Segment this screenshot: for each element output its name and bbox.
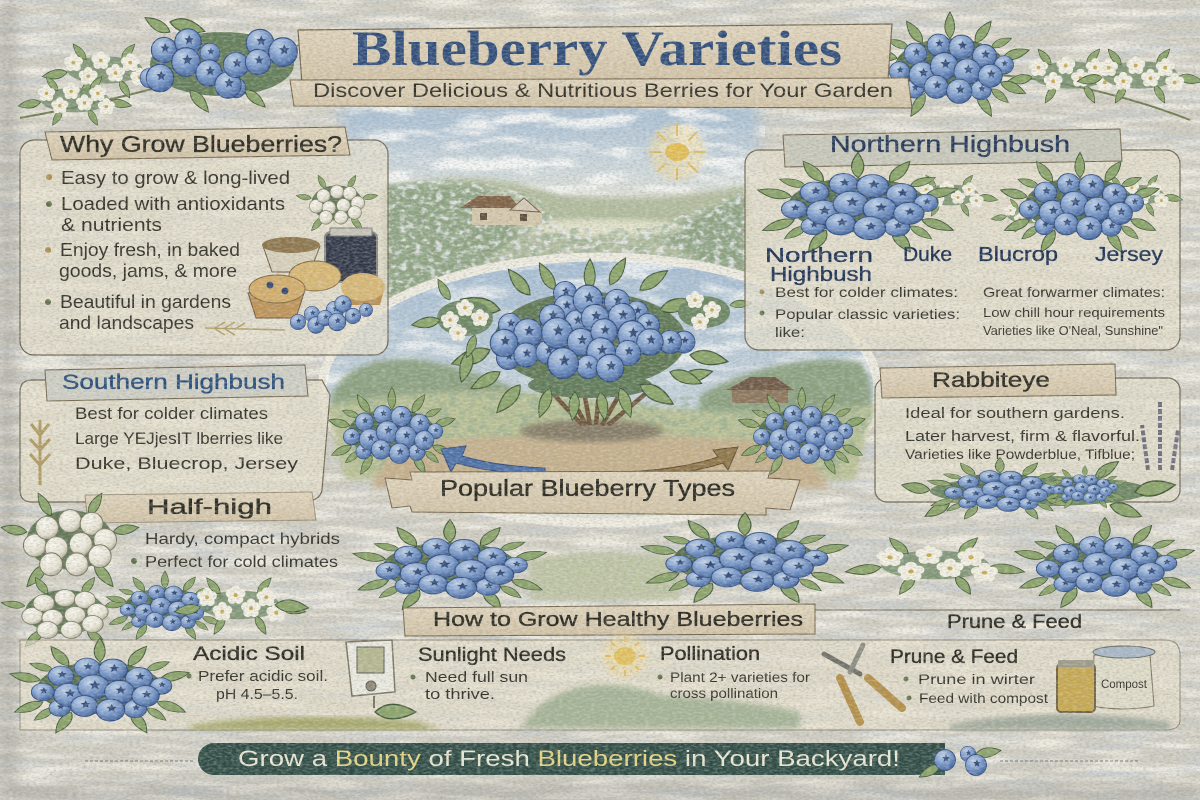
banner: half-high (85, 492, 316, 523)
banner: popular blueberry types (385, 471, 800, 515)
banner: how to grow (403, 604, 815, 636)
icon: sun (649, 124, 705, 180)
bush three (1014, 518, 1196, 610)
benefits list (45, 168, 290, 333)
benefits list: Enjoy fresh, in baked (60, 240, 240, 260)
highbush notes: Varieties like O'Neal, Sunshine" (983, 324, 1163, 338)
highbush notes: Popular classic varieties: (775, 306, 960, 322)
benefits list: Loaded with antioxidants (61, 194, 285, 214)
side bush left (327, 387, 456, 476)
icon: ph meter (346, 640, 416, 719)
icon: wheat (30, 420, 50, 485)
banner: southern highbush (45, 365, 308, 401)
highbush notes: Best for colder climates: (775, 284, 958, 300)
banner: rabbiteye (880, 364, 1116, 398)
title banner: Blueberry Varieties (352, 20, 842, 76)
banner: why grow (45, 127, 350, 160)
berry cluster left (756, 152, 998, 254)
arrow: right (620, 447, 738, 476)
berry cluster right (991, 152, 1183, 254)
step: prune and feed: Prune & Feed (890, 647, 1018, 668)
benefits list: goods, jams, & more (59, 261, 237, 281)
banner: half-high: Half-high (147, 496, 272, 519)
step: pollination: Pollination (660, 644, 760, 665)
panel: southern highbush (20, 365, 330, 502)
variety names: Jersey (1095, 244, 1163, 266)
highbush notes (760, 284, 1166, 340)
southern list: Large YEJjesIT lberries like (75, 430, 283, 448)
berry cluster (9, 638, 191, 735)
pale flower bush (845, 535, 1026, 596)
banner: northern highbush (783, 129, 1122, 167)
scene: center landscape (335, 105, 765, 310)
berry branch (901, 457, 1176, 522)
strip landscape (520, 685, 800, 728)
highbush notes: Low chill hour requirements (983, 305, 1166, 320)
icon: baked goods and jam (248, 228, 385, 318)
variety names (765, 244, 1163, 286)
icon: berry pile (290, 296, 373, 333)
variety names: Blucrop (978, 244, 1058, 266)
section: half-high (0, 491, 340, 649)
panel: how to grow (9, 604, 1180, 735)
step: acidic soil: Acidic Soil (193, 644, 305, 665)
benefits list: and landscapes (59, 313, 194, 333)
illustration: center bush oval (322, 255, 878, 523)
benefits list: Easy to grow & long-lived (61, 168, 290, 188)
step: sunlight needs (410, 645, 566, 703)
icon: compost sack (1092, 646, 1155, 709)
icon: sun (603, 634, 647, 678)
variety names: Northern (765, 245, 873, 267)
icon: pruners (824, 645, 902, 722)
icon: white berries (296, 174, 378, 233)
bush one (352, 520, 548, 612)
highbush notes: like: (775, 324, 805, 340)
step: sunlight needs: Sunlight Needs (418, 645, 566, 666)
banner: northern highbush: Northern Highbush (830, 131, 1070, 157)
step: sunlight needs: Need full sun (425, 670, 528, 686)
panel: why grow blueberries (20, 127, 388, 355)
half-high list: Hardy, compact hybrids (145, 531, 340, 548)
southern list: Duke, Bluecrop, Jersey (75, 455, 299, 473)
blueberry bush (411, 255, 752, 425)
step: prune and feed: Feed with compost (919, 691, 1048, 706)
southern list: Best for colder climates (75, 405, 268, 423)
step: pollination: Plant 2+ varieties for (670, 670, 811, 685)
title banner (298, 20, 892, 84)
banner: popular blueberry types: Popular Blueberry Types (440, 475, 735, 501)
meadow (326, 391, 874, 480)
rabbiteye list: Ideal for southern gardens. (905, 405, 1125, 422)
white berry cluster (0, 491, 139, 590)
berry branch (1, 571, 309, 649)
label: prune and feed top: Prune & Feed (947, 612, 1082, 633)
step: acidic soil: Prefer acidic soil. (198, 669, 328, 685)
footer banner (85, 743, 1140, 775)
icon: compost jar (1057, 660, 1095, 712)
half-high list (131, 531, 340, 571)
icon: compost sack: Compost (1101, 679, 1148, 691)
step: acidic soil: pH 4.5–5.5. (216, 687, 298, 703)
banner: southern highbush: Southern Highbush (62, 371, 285, 394)
icon: wheat sprig (205, 322, 285, 335)
half-high list: Perfect for cold climates (145, 554, 338, 571)
panel: rabbiteye (875, 364, 1180, 522)
icon: lavender (1142, 400, 1178, 470)
header floral right (869, 12, 1200, 120)
step: pollination (658, 644, 811, 701)
step: pollination: cross pollination (670, 686, 778, 701)
side bush right (737, 387, 866, 476)
banner: why grow: Why Grow Blueberries? (60, 131, 342, 157)
southern list (75, 405, 299, 473)
banner: rabbiteye: Rabbiteye (932, 369, 1050, 392)
subtitle banner (290, 78, 912, 108)
icon: barn (726, 377, 794, 403)
panel: northern highbush (745, 129, 1183, 350)
header floral left (18, 13, 300, 127)
rabbiteye list: Later harvest, firm & flavorful. (905, 428, 1140, 445)
dirt ground (370, 435, 830, 488)
icon: farmhouse (460, 196, 542, 225)
far tree line (332, 359, 871, 420)
banner: how to grow: How to Grow Healthy Blueberries (433, 609, 803, 631)
step: prune and feed: Prune in wirter (918, 672, 1036, 687)
step: sunlight needs: to thrive. (425, 687, 495, 703)
benefits list: Beautiful in gardens (60, 292, 231, 312)
step: acidic soil (186, 644, 328, 703)
highbush notes: Great forwarmer climates: (983, 284, 1165, 300)
arrow: left (441, 446, 545, 474)
subtitle banner: Discover Delicious & Nutritious Berries for Your Garden (313, 81, 893, 102)
variety names: Highbush (770, 264, 872, 286)
rabbiteye list: Varieties like Powderblue, Tifblue; (905, 447, 1135, 462)
rabbiteye list (905, 405, 1140, 462)
strip: blueberry bushes (352, 512, 1196, 612)
icon: footer berries (917, 746, 1002, 781)
variety names: Duke (903, 244, 952, 266)
step: prune and feed (890, 647, 1048, 706)
benefits list: & nutrients (61, 215, 162, 235)
footer banner: Grow a Bounty of Fresh Blueberries in Your Backyard! (238, 746, 900, 771)
bush two (639, 512, 850, 605)
